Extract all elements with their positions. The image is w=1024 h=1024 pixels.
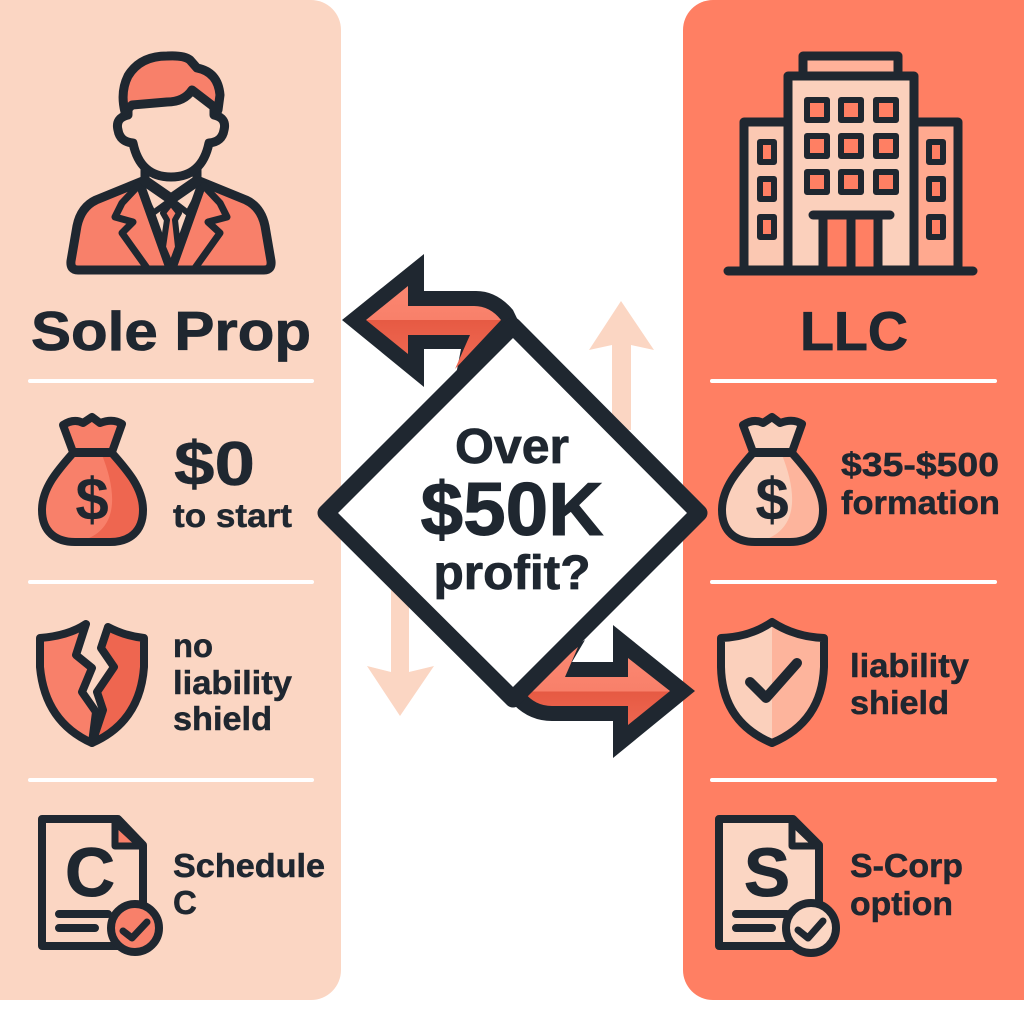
icon: schedule c document: C	[65, 834, 115, 911]
text: decision question: profit?	[434, 547, 590, 600]
icon: money bag	[722, 417, 823, 542]
text: liability: no	[173, 627, 213, 664]
text: s-corp option	[850, 847, 963, 922]
text: decision question: $50K	[420, 467, 604, 551]
text: liability: shield	[173, 700, 272, 737]
text: schedule c: C	[173, 884, 197, 921]
text: decision question: Over	[455, 420, 569, 474]
arrow: to sole prop	[342, 254, 525, 387]
text: cost: $0	[174, 430, 255, 499]
text: liability	[173, 627, 293, 737]
text: s-corp option: S-Corp	[850, 847, 963, 884]
text: decision question	[420, 420, 604, 600]
icon: broken shield	[40, 624, 144, 743]
text: liability shield	[850, 647, 970, 721]
text: liability shield: shield	[850, 684, 949, 721]
text: formation cost: $35-$500	[841, 446, 999, 483]
icon: businessperson	[71, 56, 271, 270]
heading: sole prop: Sole Prop	[31, 300, 311, 362]
heading: llc: LLC	[800, 300, 908, 362]
text: schedule c	[173, 847, 325, 921]
icon: office building	[728, 56, 973, 271]
panel: llc	[683, 0, 1024, 1000]
text: formation cost	[841, 446, 1000, 521]
text: cost: to start	[173, 497, 292, 534]
arrow: faint up	[589, 301, 654, 430]
text: formation cost: formation	[841, 484, 1000, 521]
arrow: faint down	[367, 580, 434, 716]
text: schedule c: Schedule	[173, 847, 325, 884]
text: s-corp option: option	[850, 885, 953, 922]
panel: sole prop	[0, 0, 341, 1000]
icon: money bag: $	[755, 466, 789, 533]
text: cost	[173, 430, 292, 534]
decision diamond	[326, 326, 699, 699]
text: liability: liability	[173, 664, 293, 701]
text: liability shield: liability	[850, 647, 970, 684]
icon: schedule c document	[42, 819, 159, 952]
icon: s-corp document	[719, 819, 836, 953]
icon: money bag: $	[75, 466, 109, 533]
arrow: to llc	[500, 625, 695, 758]
icon: money bag	[42, 417, 143, 542]
icon: check shield	[721, 622, 824, 743]
icon: s-corp document: S	[744, 834, 790, 911]
